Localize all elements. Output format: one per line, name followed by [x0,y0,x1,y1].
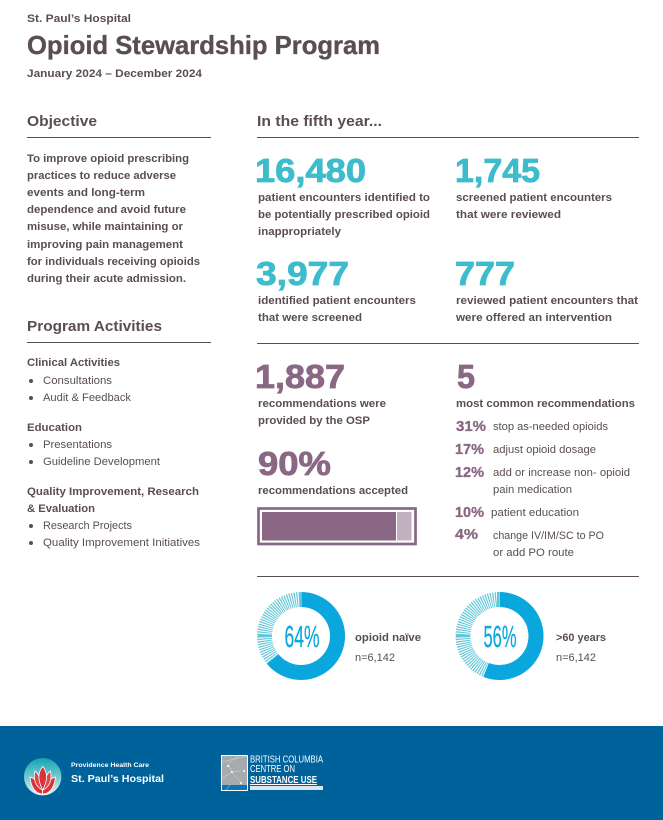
recommendation 31% [456,418,609,435]
clinical activities list: Audit & Feedback [43,392,131,404]
objective text: To improve opioid prescribing [27,153,189,165]
quality improvement list: Quality Improvement Initiatives [43,537,201,549]
quality improvement list [27,486,201,549]
stat: 777: were offered an intervention [455,312,612,324]
objective text: misuse, while maintaining or [27,221,184,233]
donut chart: over 60 years 56%: >60 years [556,632,606,644]
recommendation 10%: patient education [491,507,579,519]
hospital name: St. Paul’s Hospital [27,13,131,25]
stat: 16,480: inappropriately [258,226,342,238]
organisation name: Providence Health Care: Providence Health Care [71,762,149,769]
header [27,13,380,80]
stat: 777: 777 [455,255,515,292]
stat: 1,745: screened patient encounters [456,192,612,204]
stat: 1,887 [255,358,386,427]
recommendation 17%: adjust opioid dosage [493,444,596,456]
objective heading: Objective [27,113,97,130]
program activities heading: Program Activities [27,318,162,335]
recommendation 31%: 31% [456,418,486,435]
stat: 777 [455,255,638,324]
recommendation 12% [455,464,630,496]
donut chart: opioid naive 64% [258,592,421,672]
logo: BC Centre on Substance Use: BRITISH COLUMBIA [250,754,323,766]
objective text: during their acute admission. [27,273,186,285]
quality improvement list: Research Projects [43,520,132,532]
recommendation 4% [455,526,604,559]
stat: 3,977 [256,255,416,324]
objective text: improving pain management [27,239,183,251]
stat: 1,887: provided by the OSP [258,415,370,427]
stat: 3,977: identified patient encounters [258,295,416,307]
stat: 1,745 [455,152,612,221]
recommendation 31%: stop as-needed opioids [493,421,609,433]
recommendations heading: most common recommendations [456,398,635,410]
stat: 90% accepted: 90% [258,445,331,482]
recommendation 10% [455,504,579,521]
logo: BC Centre on Substance Use: SUBSTANCE USE [250,775,317,786]
stat: 16,480 [255,152,430,238]
education list: Education [27,422,82,434]
recommendation 4%: 4% [455,526,478,543]
recommendation 12%: 12% [455,464,484,481]
stat: 1,887: recommendations were [258,398,386,410]
panel: objective [27,113,211,285]
title: Opioid Stewardship Program [27,30,380,60]
stat: 90% accepted: recommendations accepted [258,485,408,497]
clinical activities list: Consultations [43,375,113,387]
recommendation 12%: pain medication [493,484,572,496]
stat: 16,480: patient encounters identified to [258,192,430,204]
donut chart: over 60 years 56%: 56% [484,619,516,654]
donut chart: opioid naive 64%: n=6,142 [355,652,395,664]
education list [27,422,160,468]
quality improvement list: Quality Improvement, Research [27,486,199,498]
organisation name: St. Paul's Hospital: St. Paul’s Hospital [71,773,164,785]
objective text [27,153,200,285]
donut chart: opioid naive 64%: opioid naïve [355,632,421,644]
fifth year heading: In the fifth year... [257,113,382,130]
clinical activities list [27,357,131,404]
stat: 1,745: that were reviewed [456,209,561,221]
date range: January 2024 – December 2024 [27,68,203,80]
recommendation 4%: or add PO route [493,547,574,559]
stat: 3,977: 3,977 [256,255,349,292]
donut chart: over 60 years 56%: n=6,142 [556,652,596,664]
logo: St. Paul's Hospital lotus [24,758,61,795]
stat: 3,977: that were screened [258,312,362,324]
number 5: 5 [457,358,475,395]
stat: 90% accepted [258,445,408,497]
education list: Guideline Development [43,456,160,468]
education list: Presentations [43,439,113,451]
donut chart: over 60 years 56% [456,592,606,672]
objective text: events and long-term [27,187,145,199]
logo: BC Centre on Substance Use [222,754,323,790]
top recommendations [455,358,635,559]
recommendation 17% [455,441,596,458]
panel: program activities [27,318,211,549]
recommendation 10%: 10% [455,504,484,521]
donut chart: opioid naive 64%: 64% [284,619,320,654]
stat: 16,480: be potentially prescribed opioid [258,209,430,221]
stat: 1,745: 1,745 [455,152,540,189]
objective text: for individuals receiving opioids [27,256,200,268]
recommendation 4%: change IV/IM/SC to PO [493,530,604,542]
stat: 16,480: 16,480 [255,152,366,189]
recommendation 17%: 17% [455,441,484,458]
progress bar: 90% [258,508,416,544]
recommendation 12%: add or increase non- opioid [493,467,630,479]
stat: 1,887: 1,887 [255,358,345,395]
quality improvement list: & Evaluation [27,503,95,515]
panel: fifth year statistics [255,113,639,672]
objective text: practices to reduce adverse [27,170,176,182]
objective text: dependence and avoid future [27,204,186,216]
stat: 777: reviewed patient encounters that [456,295,638,307]
footer [0,726,663,820]
logo: BC Centre on Substance Use: CENTRE ON [250,764,295,775]
clinical activities list: Clinical Activities [27,357,120,369]
